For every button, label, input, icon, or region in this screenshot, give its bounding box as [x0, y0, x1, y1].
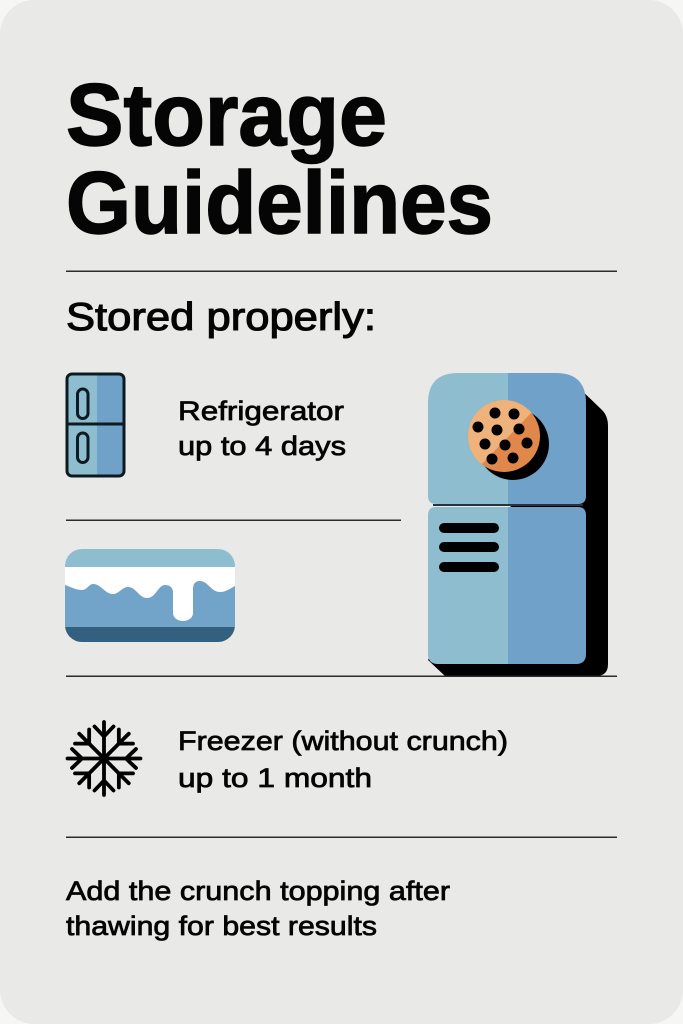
fridge handle bars: [439, 523, 499, 572]
text: freezer duration: up to 1 month: [178, 763, 372, 793]
fridge bottom door: [428, 507, 586, 664]
text: crunch topping note: [66, 876, 450, 941]
text: refrigerator duration: [178, 396, 346, 461]
text: refrigerator duration: up to 4 days: [178, 431, 346, 461]
title: Guidelines: [66, 153, 493, 252]
text: freezer duration: Freezer (without crunch): [178, 726, 508, 756]
title: [66, 65, 493, 252]
illustration: large refrigerator with cookie: [428, 373, 608, 676]
heading: stored properly: Stored properly:: [66, 296, 376, 339]
fridge shadow: [428, 385, 608, 676]
icon: small refrigerator: [67, 374, 124, 476]
fridge top door: [428, 373, 586, 504]
text: crunch topping note: Add the crunch topping after: [66, 876, 450, 906]
title: Storage: [66, 65, 387, 164]
text: refrigerator duration: Refrigerator: [178, 396, 344, 426]
cookie: [468, 400, 549, 480]
text: crunch topping note: thawing for best results: [66, 911, 377, 941]
icon: frosted ice tray: [65, 549, 235, 642]
icon: snowflake: [68, 722, 140, 795]
text: freezer duration: [178, 726, 508, 793]
